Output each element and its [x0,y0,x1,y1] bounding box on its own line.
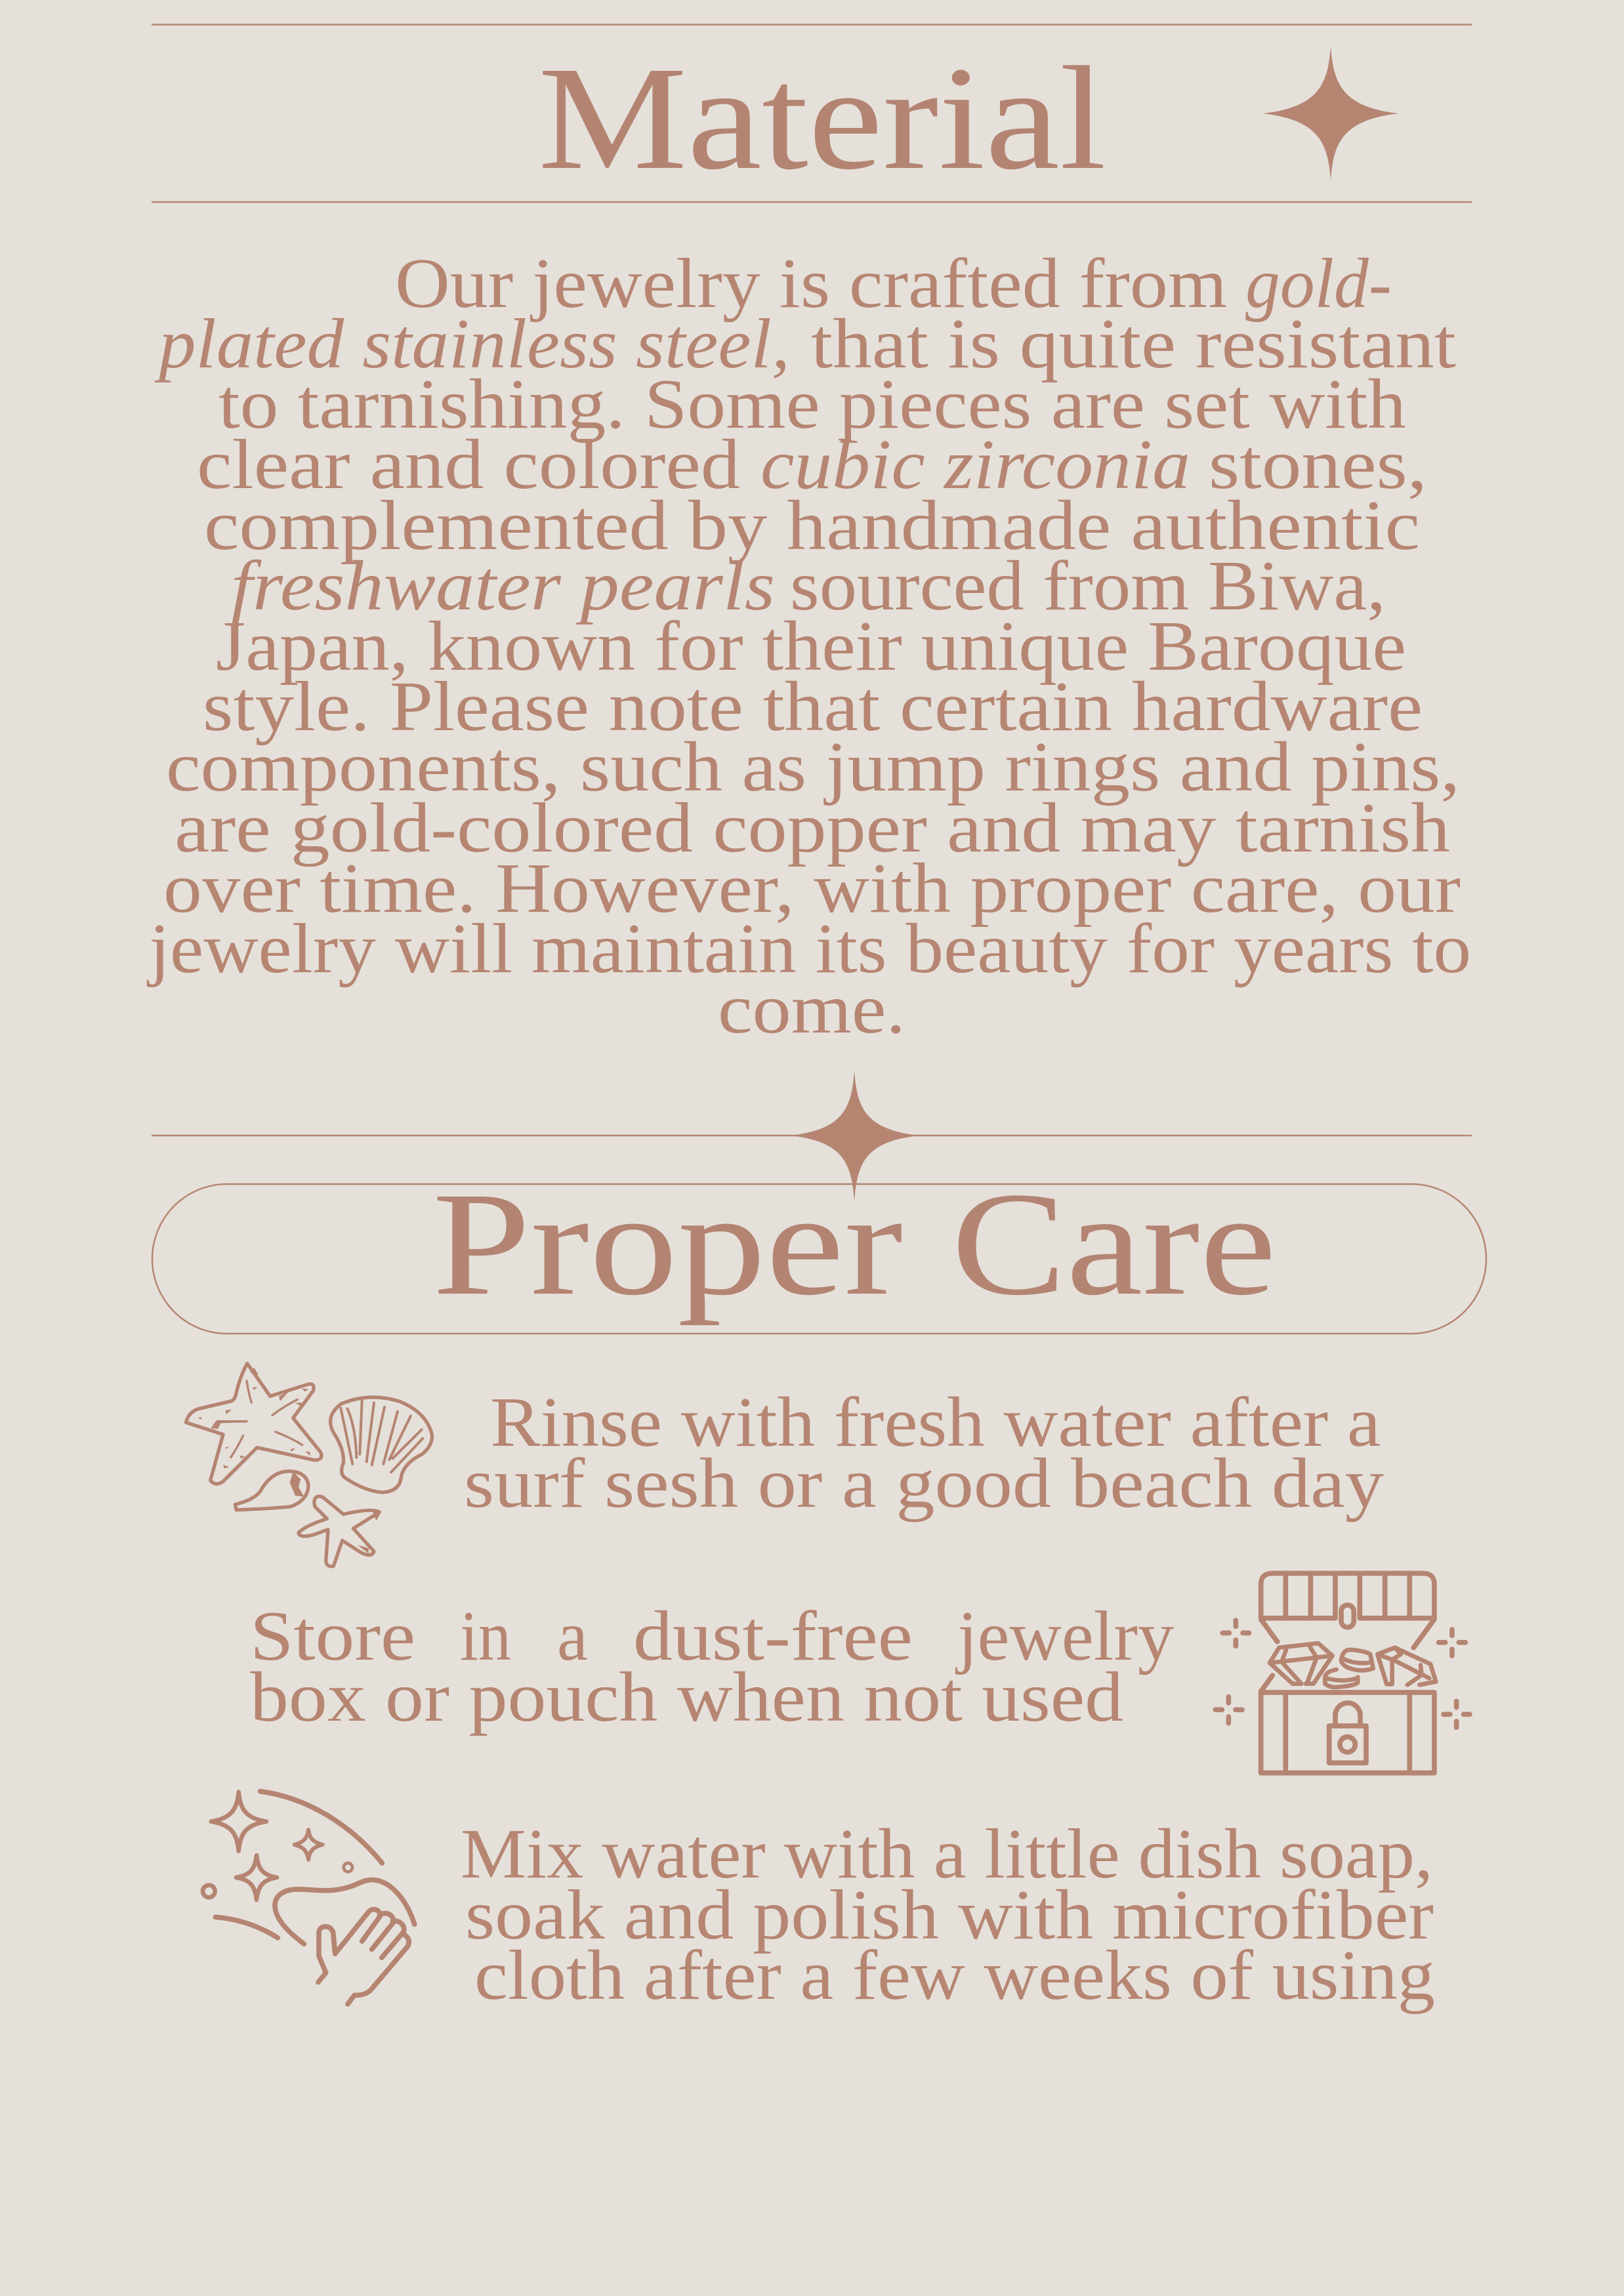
text block: store [250,1597,1174,1736]
text block: material description: come. [718,970,906,1048]
icon: treasure chest [1215,1573,1470,1773]
heading: Material: Material [538,36,1106,200]
text block: material description: complemented by handmade authentic [204,487,1420,565]
icon: starfish and shells [186,1363,432,1567]
text block: rinse [464,1384,1384,1523]
text block: material description: gold- [1245,245,1392,323]
text block: material description: to tarnishing. Some pieces are set with [219,365,1406,443]
text block: store: in [460,1597,511,1675]
text block: store: dust-free [633,1597,913,1675]
text block: store: jewelry [955,1597,1174,1675]
icon: polishing hand with sparkles [203,1792,415,2004]
text block: material description: are gold-colored copper and may tarnish [175,789,1450,867]
text block: rinse: surf sesh or a good beach day [464,1445,1384,1523]
text block: material description: style. Please note that certain hardware [203,668,1423,746]
text block: material description: freshwater pearls [231,547,775,625]
heading: Proper Care: Proper [432,1162,903,1326]
text block: material description: Our jewelry is crafted from [395,245,1227,323]
text block: material description: stones, [1209,426,1427,504]
text block: material description: jewelry will maintain its beauty for years to [146,910,1471,988]
text block: material description: that is quite resistant [811,305,1456,383]
heading: Proper Care: Care [951,1162,1276,1326]
text block: soak and polish: soak and polish with microfiber [465,1876,1434,1954]
heading: Proper Care [432,1162,1276,1326]
icon: divider star [790,1071,919,1202]
icon: four-point star [1263,46,1398,180]
text block: material description: over time. However, with proper care, our [163,850,1461,928]
text block: soak and polish: Mix water with a little dish soap, [461,1815,1433,1893]
text block: material description: sourced from Biwa, [790,547,1386,625]
text block: material description: plated stainless steel, [154,305,790,383]
pill frame: Proper Care [152,1184,1486,1334]
text block: material description: components, such as jump rings and pins, [166,728,1460,806]
text block: material description: clear and colored [197,426,740,504]
text block: material description [146,245,1471,1048]
text block: rinse: Rinse with fresh water after a [490,1384,1381,1462]
text block: material description: Japan, known for their unique Baroque [216,607,1406,686]
text block: soak and polish [461,1815,1435,2015]
text block: store: Store [250,1597,415,1675]
text block: store: a [557,1597,588,1675]
text block: store: box or pouch when not used [250,1658,1123,1736]
text block: soak and polish: cloth after a few weeks of using [474,1937,1435,2015]
text block: material description: cubic zirconia [760,426,1190,504]
